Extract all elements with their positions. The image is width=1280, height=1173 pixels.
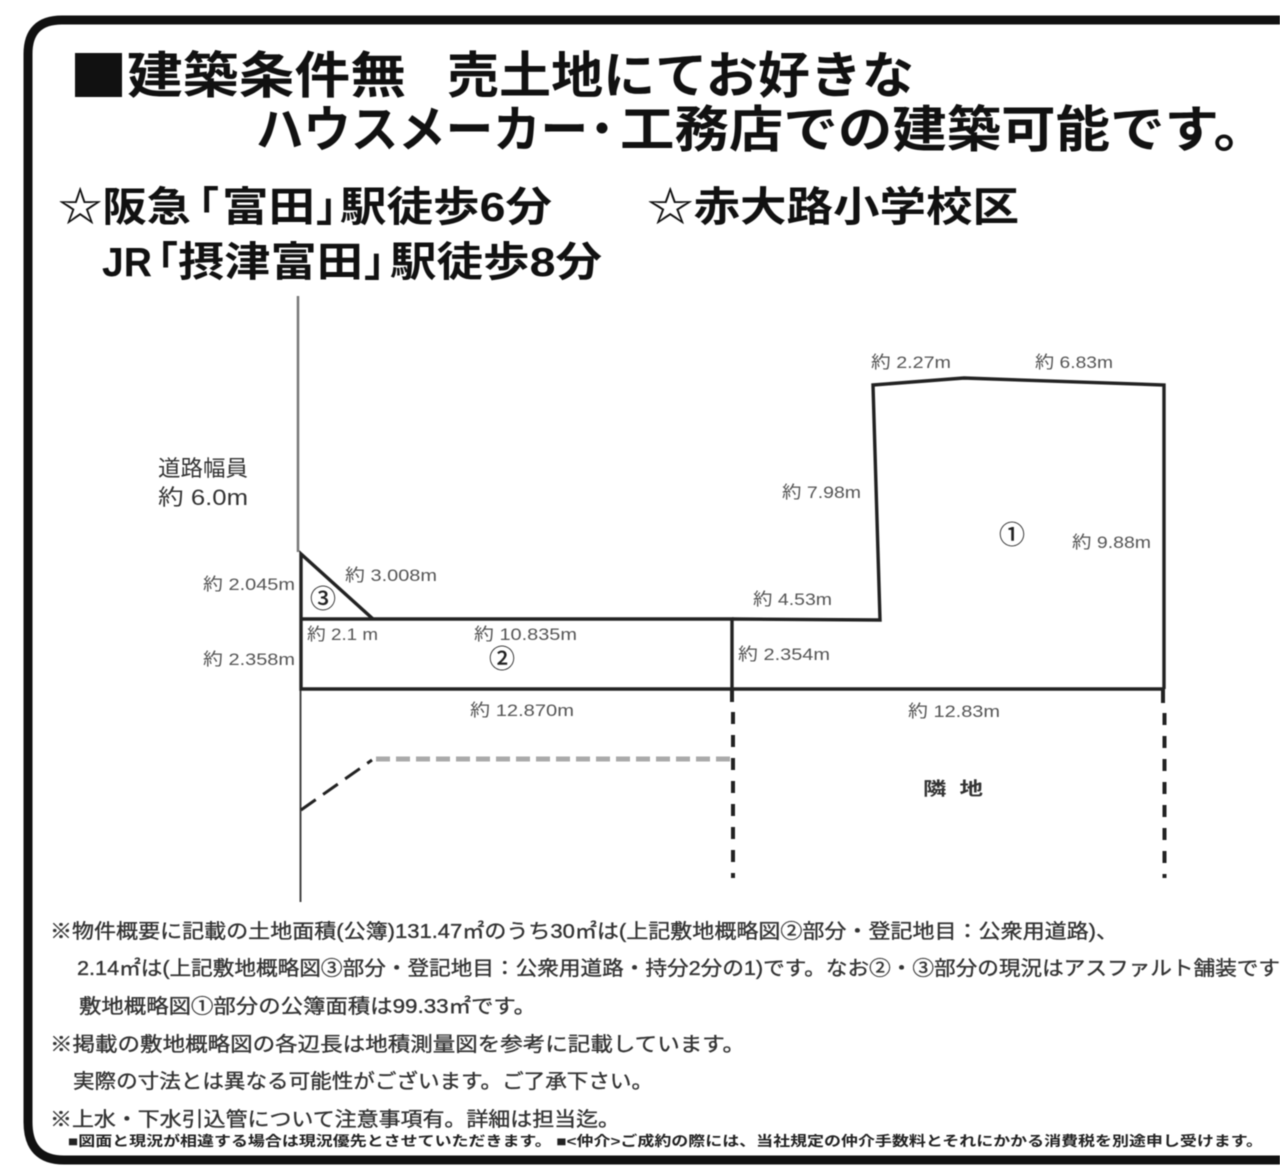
notes: ※掲載の敷地概略図の各辺長は地積測量図を参考に記載しています。 [50, 1033, 745, 1056]
station access: 「 [137, 239, 178, 285]
station access: 「 [178, 184, 219, 230]
station access: ☆阪急 [58, 184, 191, 230]
road line [297, 296, 299, 552]
dimension labels: 約 10.835m [474, 625, 577, 644]
site plan [301, 378, 1164, 878]
station access: 富田 [222, 184, 315, 230]
dimension labels: 約 6.83m [1035, 353, 1113, 372]
road setback dashed line [301, 759, 730, 810]
station access: 」 [316, 184, 357, 230]
title [75, 48, 1268, 158]
dimension labels: 約 12.870m [470, 701, 574, 720]
title: 売土地にてお好きな [447, 48, 914, 104]
station access [58, 184, 602, 285]
plot 3 outline [301, 554, 373, 619]
notes: 2.14㎡は(上記敷地概略図③部分・登記地目：公衆用道路・持分2分の1)です。なお②・③部分の現況はアスファルト舗装です [77, 956, 1280, 980]
title: 工務店での建築可能です。 [620, 102, 1268, 158]
road width label: 道路幅員 [158, 456, 248, 481]
title: ハウスメーカー [256, 102, 588, 158]
dimension labels: 約 3.008m [345, 566, 437, 585]
dimension labels: 約 2.045m [203, 575, 295, 594]
footer disclaimer: ■図面と現況が相違する場合は現況優先とさせていただきます。 ■<仲介>ご成約の際には、当社規定の仲介手数料とそれにかかる消費税を別途申し受けます。 [68, 1133, 1263, 1149]
plot numbers: ③ [310, 584, 336, 614]
school district: ☆赤大路小学校区 [647, 184, 1019, 230]
road width label [158, 456, 248, 510]
notes: ※上水・下水引込管について注意事項有。詳細は担当迄。 [50, 1108, 620, 1131]
road width label: 約 6.0m [158, 485, 248, 510]
neighbouring land label: 隣 地 [923, 779, 983, 799]
notes [50, 919, 1280, 1131]
plot 1 outline [732, 378, 1164, 689]
plot numbers [310, 520, 1025, 674]
dimension labels: 約 2.354m [738, 645, 830, 664]
dimension labels: 約 2.1 m [307, 625, 378, 644]
station access: 駅徒歩6分 [340, 184, 552, 230]
title: 建築条件無 [127, 48, 406, 104]
station access: JR [102, 239, 152, 285]
dimension labels: 約 7.98m [782, 483, 861, 502]
notes: ※物件概要に記載の土地面積(公簿)131.47㎡のうち30㎡は(上記敷地概略図②部分・登記地目：公衆用道路)、 [50, 919, 1118, 943]
station access: 駅徒歩8分 [390, 239, 602, 285]
plot 2 outline [301, 619, 1164, 689]
dimension labels: 約 2.27m [871, 353, 951, 372]
road line lower [300, 690, 302, 902]
dimension labels: 約 12.83m [908, 702, 1000, 721]
neighbouring boundary dashed lines [732, 689, 1164, 878]
station access: 」 [364, 239, 405, 285]
dimension labels: 約 4.53m [753, 590, 832, 609]
plot numbers: ① [999, 520, 1025, 550]
dimension labels: 約 2.358m [203, 650, 295, 669]
dimension labels: 約 9.88m [1072, 533, 1151, 552]
station access: 摂津富田 [178, 239, 363, 285]
notes: 敷地概略図①部分の公簿面積は99.33㎡です。 [79, 994, 536, 1018]
plot numbers: ② [489, 644, 515, 674]
notes: 実際の寸法とは異なる可能性がございます。ご了承下さい。 [73, 1069, 653, 1093]
dimension labels [203, 353, 1151, 721]
